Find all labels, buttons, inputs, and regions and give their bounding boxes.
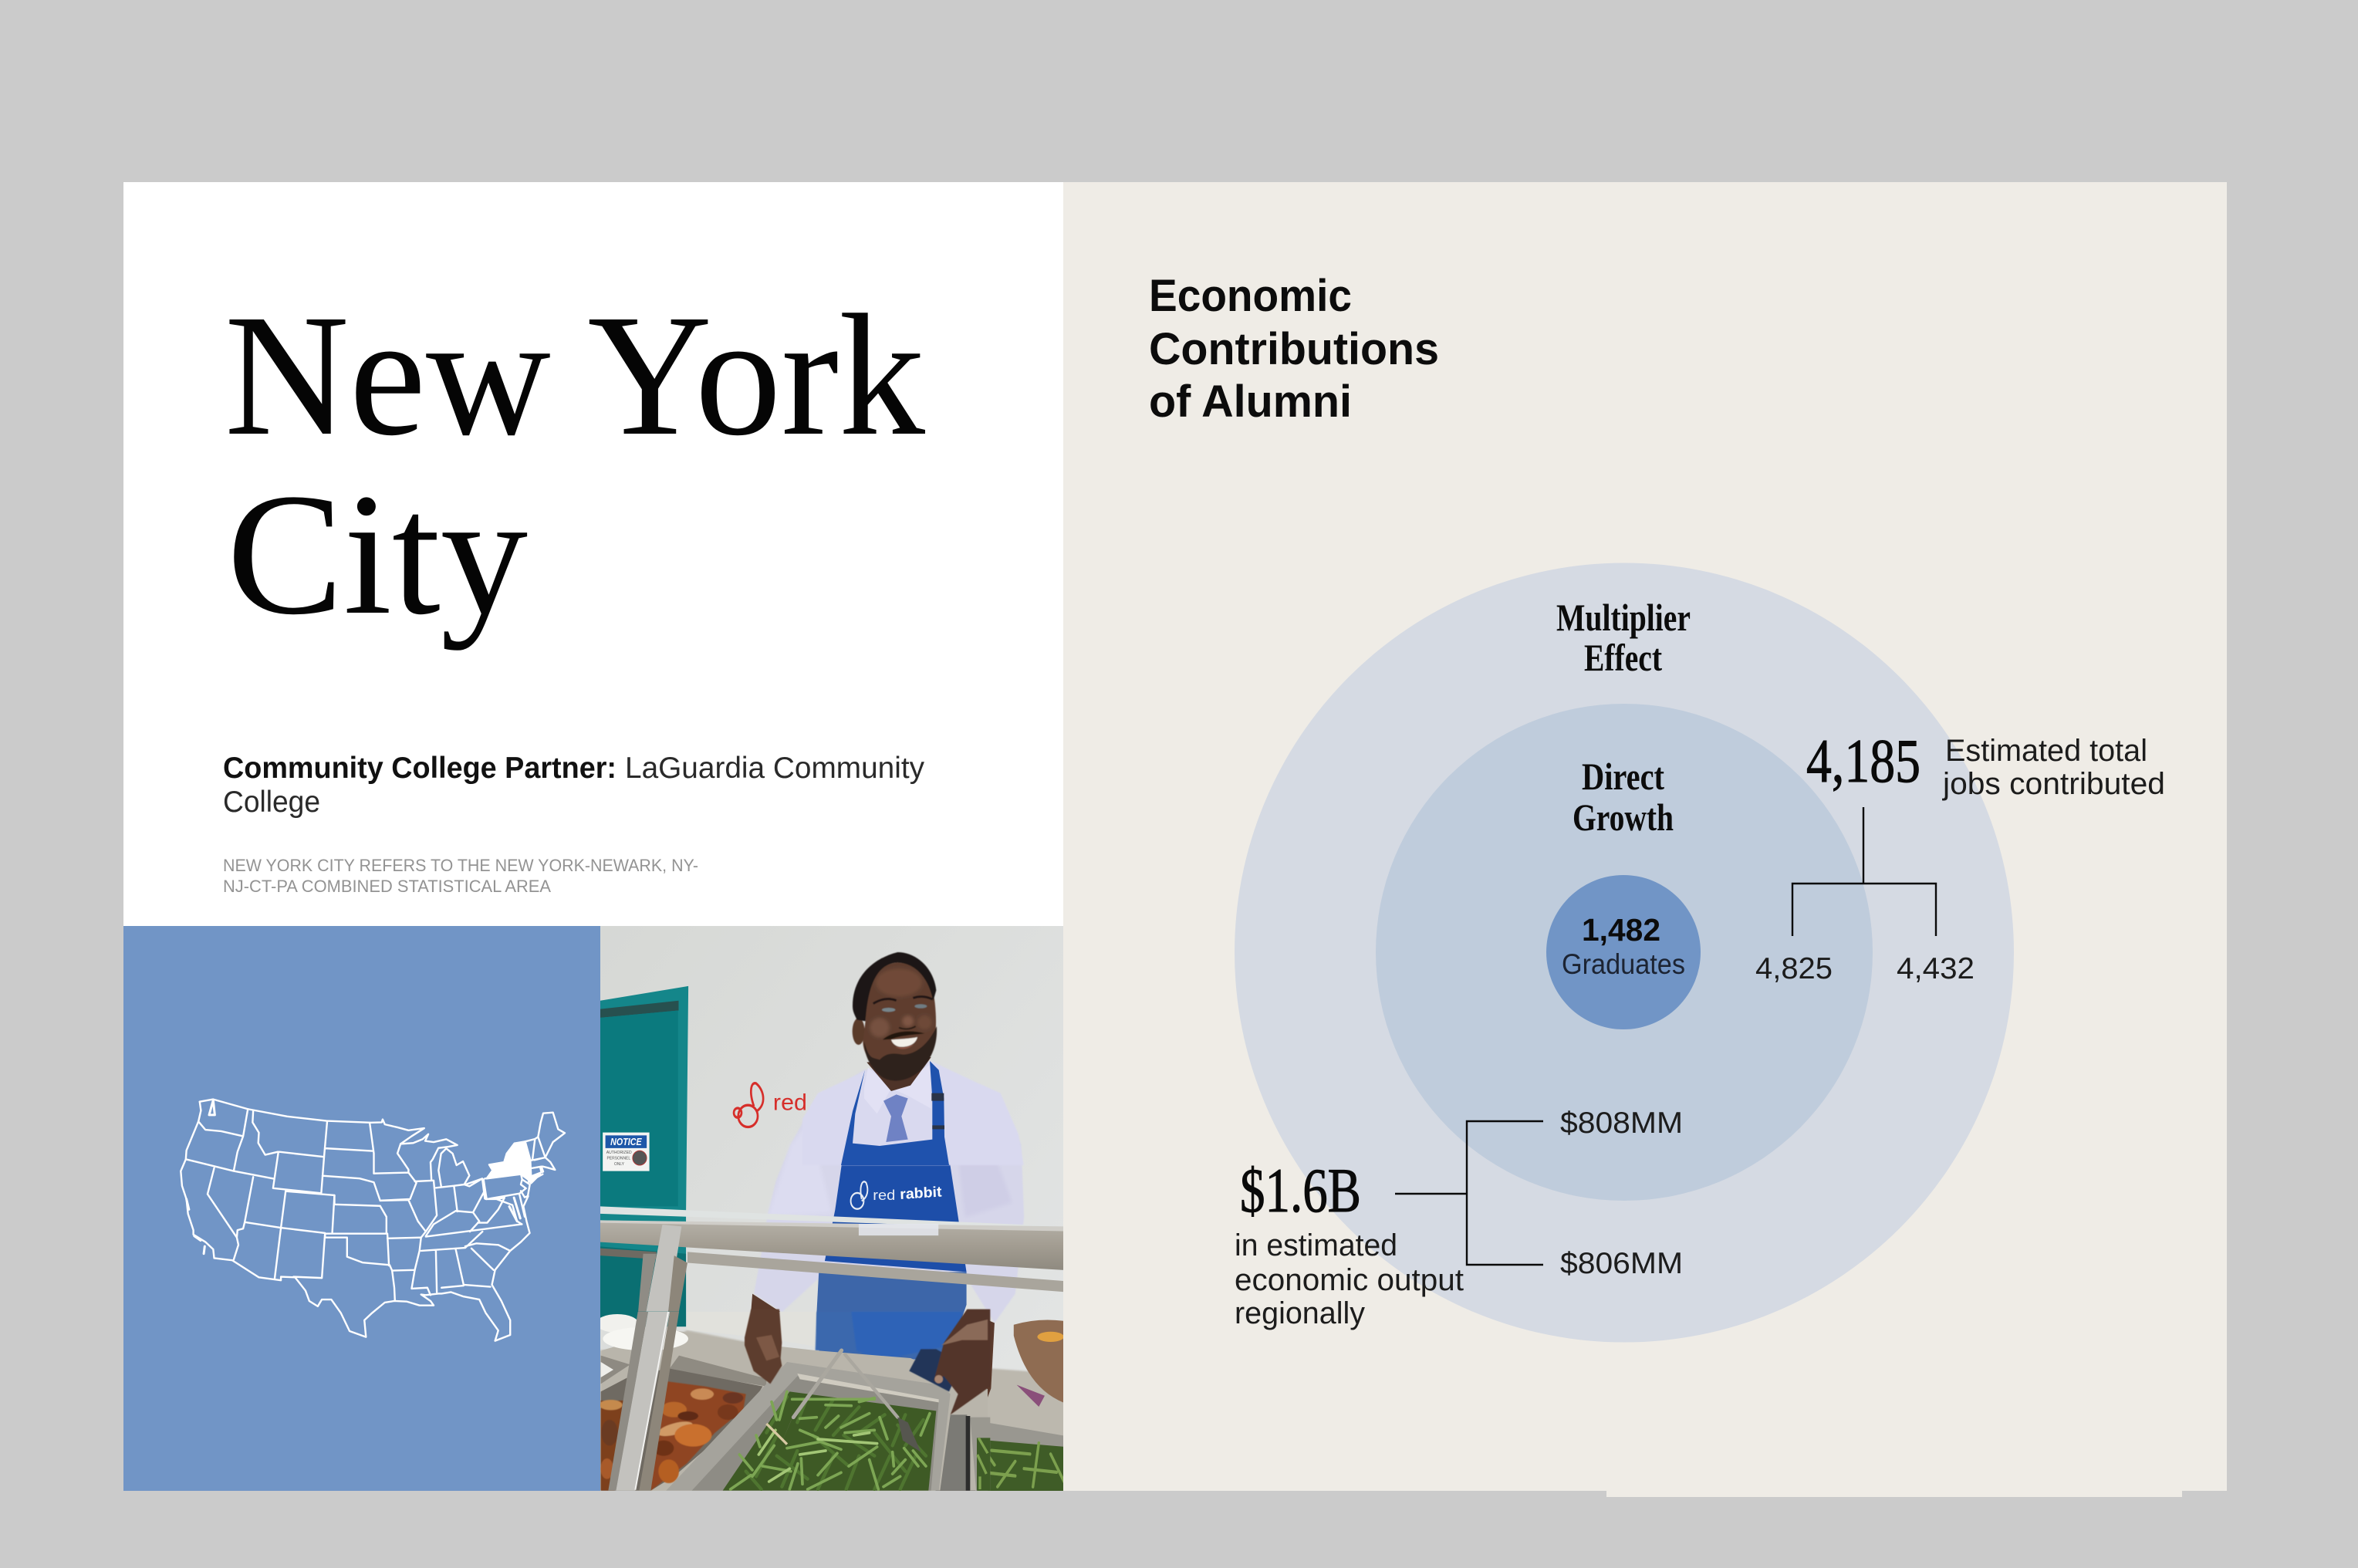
icon: US map with New York highlighted	[181, 1100, 565, 1341]
text block: community college partner: LaGuardia Community	[625, 752, 924, 785]
label: direct growth	[1573, 755, 1674, 839]
values: direct and multiplier jobs: 4,825	[1755, 952, 1833, 985]
first tray: rice	[601, 1356, 630, 1384]
label: multiplier effect: Multiplier	[1556, 596, 1691, 639]
text block: community college partner: College	[223, 786, 320, 819]
notice sign: NOTICE	[610, 1136, 642, 1147]
callout: $1.6B economic output	[1235, 1155, 1464, 1330]
heading: economic contributions of alumni	[1149, 271, 1439, 427]
title	[225, 279, 925, 651]
hands	[745, 1309, 990, 1414]
neck	[867, 1057, 931, 1091]
man: head, collar, tie and apron bib	[802, 952, 1024, 1165]
title: New York	[225, 279, 925, 471]
apron logo: red	[873, 1186, 895, 1203]
glass reflection backdrop	[687, 1312, 816, 1331]
callout: $1.6B economic output: $1.6B	[1240, 1155, 1361, 1225]
panel: right beige panel	[1063, 182, 2227, 1497]
counter	[600, 1330, 1065, 1491]
callout: 4,185 total jobs: 4,185	[1806, 728, 1921, 796]
tray gap	[940, 1414, 967, 1491]
collar	[864, 1065, 931, 1113]
callout: 4,185 total jobs: Estimated total	[1945, 734, 2147, 768]
apron logo	[851, 1181, 942, 1209]
tree connector: output	[1395, 1121, 1543, 1265]
photo: smiling man serving food at a buffet	[596, 926, 1065, 1493]
tongs	[793, 1350, 897, 1418]
values: direct and multiplier output: $808MM	[1560, 1107, 1683, 1140]
panel: blue map panel	[123, 926, 600, 1491]
values: direct and multiplier output	[1560, 1107, 1683, 1280]
chart: concentric circles	[1235, 563, 2014, 1343]
notice sign: ONLY	[614, 1162, 625, 1167]
bowl	[1014, 1320, 1065, 1407]
sneeze guard: glass bars	[600, 1206, 1065, 1312]
heading: economic contributions of alumni: Contributions	[1149, 324, 1439, 374]
text block: community college partner: Community College Partner:	[223, 752, 617, 785]
callout: $1.6B economic output: in estimated	[1235, 1228, 1397, 1262]
title: City	[227, 458, 528, 651]
tree connector: jobs	[1792, 807, 1936, 936]
label: graduates count	[1562, 912, 1685, 980]
label: multiplier effect: Effect	[1584, 636, 1662, 679]
values: direct and multiplier jobs	[1755, 952, 1975, 985]
heading: economic contributions of alumni: Economic	[1149, 271, 1352, 321]
label: direct growth: Growth	[1573, 796, 1674, 839]
notice sign: AUTHORIZED	[606, 1151, 632, 1155]
man: wrists	[751, 1293, 995, 1397]
panel: left white panel	[123, 182, 1063, 926]
text block: footnote	[223, 856, 698, 896]
tie	[883, 1094, 908, 1142]
values: direct and multiplier output: $806MM	[1560, 1247, 1683, 1280]
glass post	[608, 1312, 648, 1491]
callout: $1.6B economic output: regionally	[1235, 1296, 1365, 1330]
face	[853, 952, 937, 1080]
notice sign: PERSONNEL	[607, 1156, 631, 1161]
door	[600, 986, 688, 1326]
text block: footnote: NJ-CT-PA COMBINED STATISTICAL AREA	[223, 877, 551, 896]
label: graduates count: 1,482	[1582, 912, 1660, 948]
chicken tray	[601, 1368, 762, 1491]
notice sign	[603, 1133, 650, 1171]
callout: $1.6B economic output: economic output	[1235, 1263, 1464, 1297]
wall logo: red rabbit	[734, 1083, 807, 1127]
man: apron	[816, 1164, 967, 1360]
text block: footnote: NEW YORK CITY REFERS TO THE NEW YORK-NEWARK, NY-	[223, 856, 698, 875]
label: graduates count: Graduates	[1562, 948, 1685, 980]
wall logo: red rabbit: red	[773, 1090, 807, 1115]
callout: 4,185 total jobs: jobs contributed	[1942, 767, 2165, 801]
food counter: trays, hands and tongs	[596, 1309, 990, 1491]
food: second beans tray	[935, 1423, 1063, 1491]
plates	[600, 1314, 637, 1332]
apron straps	[841, 1061, 949, 1165]
man: shirt	[754, 1064, 1024, 1323]
callout: 4,185 total jobs	[1806, 728, 2165, 801]
label: multiplier effect	[1556, 596, 1691, 679]
values: direct and multiplier jobs: 4,432	[1897, 952, 1975, 985]
text block: community college partner	[223, 752, 924, 819]
label: direct growth: Direct	[1582, 755, 1664, 798]
heading: economic contributions of alumni: of Alumni	[1149, 377, 1352, 427]
green bean tray	[666, 1362, 951, 1491]
apron logo: rabbit	[900, 1183, 942, 1202]
